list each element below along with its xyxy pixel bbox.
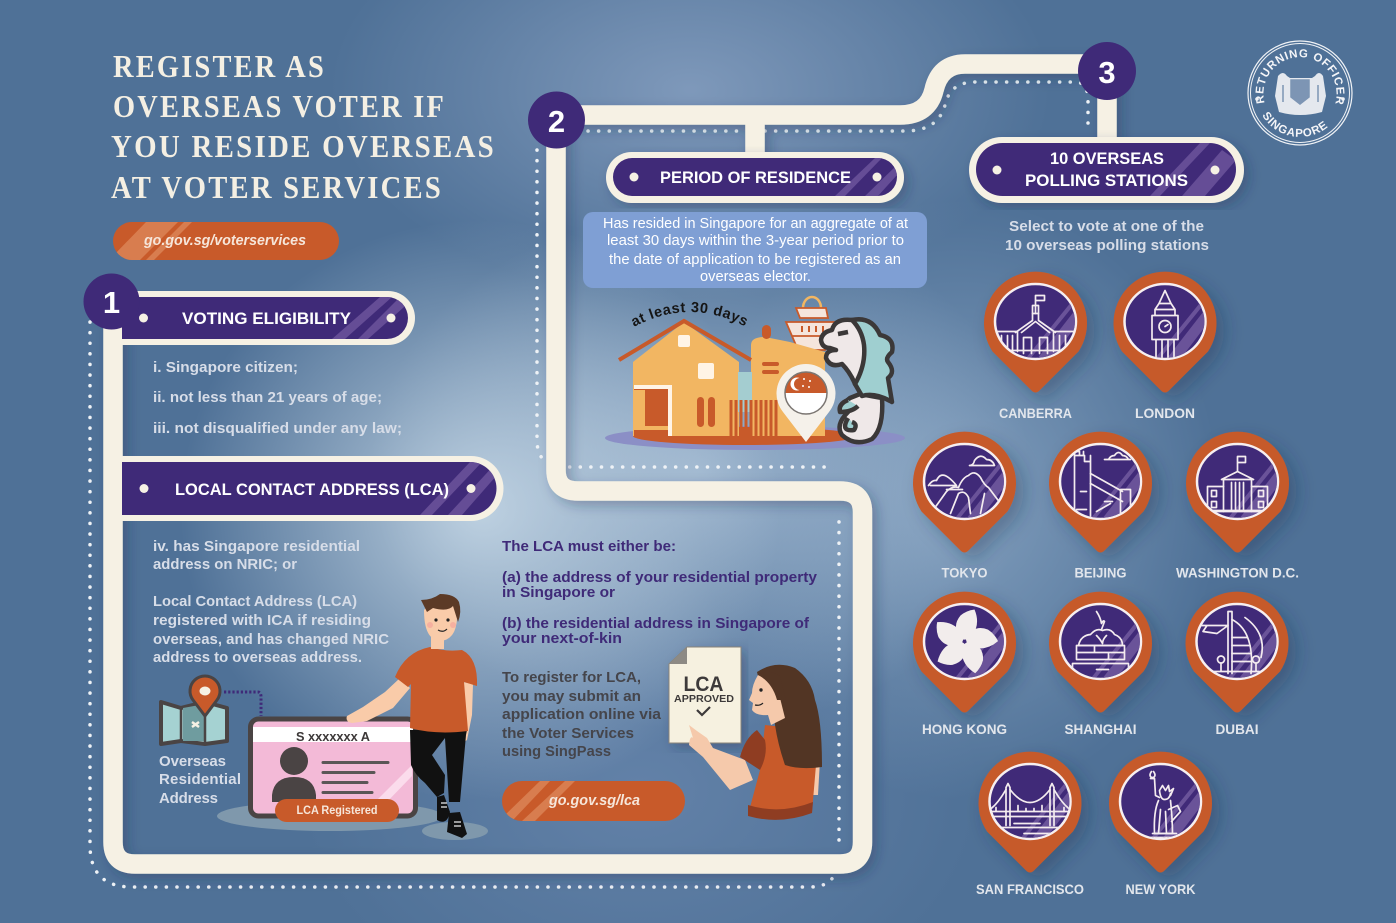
text: overseas residential address: Address xyxy=(159,790,218,807)
step number 3 xyxy=(1078,42,1136,100)
dotted route lines xyxy=(90,82,1088,887)
route path: cream connector line xyxy=(113,64,1107,864)
text: LCA requirements: in Singapore or xyxy=(502,584,615,601)
text: how to register for LCA xyxy=(502,669,662,760)
illustration: approved LCA document xyxy=(669,647,741,743)
callout: residence requirement: the date of application to be registered as an xyxy=(609,252,901,268)
title: REGISTER AS xyxy=(113,48,326,84)
pin: Shanghai: SHANGHAI xyxy=(1064,721,1136,737)
text: how to register for LCA: you may submit an xyxy=(502,688,641,705)
pin: Beijing: BEIJING xyxy=(1074,564,1127,580)
eligibility list: ii. not less than 21 years of age; xyxy=(153,389,382,406)
callout: residence requirement: least 30 days within the 3-year period prior to xyxy=(607,233,904,249)
text: overseas residential address xyxy=(159,753,241,807)
panel heading: period of residence xyxy=(606,152,904,203)
eligibility list: i. Singapore citizen; xyxy=(153,359,298,376)
text: LCA requirements: (a) the address of your residential property xyxy=(502,569,818,586)
logo: Returning Officer Singapore seal: RETURNING OFFICER xyxy=(1256,49,1344,104)
pin: Canberra: CANBERRA xyxy=(999,405,1072,421)
pin: London xyxy=(1114,272,1216,421)
title xyxy=(111,48,496,205)
panel heading: 10 overseas polling stations xyxy=(969,137,1244,203)
NRIC card: S xxxxxxx A xyxy=(296,729,371,744)
pin: New York xyxy=(1109,752,1212,897)
text: polling station instruction: Select to vote at one of the xyxy=(1009,218,1204,235)
text: LCA requirements xyxy=(502,538,818,647)
text: residential address criteria: registered with ICA if residing xyxy=(153,612,371,629)
text: residential address criteria: overseas, and has changed NRIC xyxy=(153,631,389,648)
illustration: woman pointing at document xyxy=(689,665,822,820)
pin: San Francisco: SAN FRANCISCO xyxy=(976,881,1084,897)
icon: merlion statue xyxy=(821,319,892,442)
text: how to register for LCA: To register for LCA, xyxy=(502,669,641,686)
link pill: LCA: go.gov.sg/lca xyxy=(548,792,640,809)
step number 3: 3 xyxy=(1098,55,1116,90)
link pill: voter services xyxy=(113,222,339,260)
pin: Dubai xyxy=(1186,592,1288,737)
step number 2 xyxy=(528,92,585,148)
panel heading: local contact address xyxy=(122,456,504,521)
pin: San Francisco xyxy=(976,752,1084,897)
text: how to register for LCA: using SingPass xyxy=(502,743,611,760)
title: AT VOTER SERVICES xyxy=(111,169,443,205)
text: how to register for LCA: application online via xyxy=(502,706,662,723)
panel heading: voting eligibility: VOTING ELIGIBILITY xyxy=(182,309,352,328)
illustration: approved LCA document: APPROVED xyxy=(674,693,734,705)
panel heading: local contact address: LOCAL CONTACT ADDRESS (LCA) xyxy=(175,480,449,499)
panel heading: 10 overseas polling stations: 10 OVERSEAS xyxy=(1050,149,1164,168)
pin: Washington D.C.: WASHINGTON D.C. xyxy=(1176,564,1299,580)
pin: New York: NEW YORK xyxy=(1126,881,1196,897)
logo: Returning Officer Singapore seal: SINGAPORE xyxy=(1263,112,1328,137)
text: overseas residential address: Overseas xyxy=(159,753,226,770)
eligibility list xyxy=(153,359,402,437)
text: polling station instruction xyxy=(1005,218,1209,254)
pin: Washington D.C. xyxy=(1176,432,1299,580)
pin: Canberra xyxy=(984,272,1087,421)
illustration: approved LCA document: LCA xyxy=(684,673,724,696)
icon: flag location pin xyxy=(776,364,836,442)
text: residential address criteria: Local Contact Address (LCA) xyxy=(153,593,357,610)
step number 1 xyxy=(84,274,140,330)
NRIC card xyxy=(250,719,416,822)
pin: Shanghai xyxy=(1049,592,1152,737)
pin: Tokyo xyxy=(913,432,1016,580)
text: residential address criteria: iv. has Singapore residential xyxy=(153,538,360,555)
callout: residence requirement: Has resided in Singapore for an aggregate of at xyxy=(603,216,908,232)
illustration: Singapore home and landmarks xyxy=(605,296,905,450)
text: LCA requirements: (b) the residential address in Singapore of xyxy=(502,615,810,632)
logo: Returning Officer Singapore seal xyxy=(1247,40,1353,146)
step number 2: 2 xyxy=(548,104,565,139)
pin: Hong Kong xyxy=(913,592,1016,737)
text: residential address criteria: address on NRIC; or xyxy=(153,556,297,573)
dotted link from map to card xyxy=(224,692,261,716)
panel heading: 10 overseas polling stations: POLLING STATIONS xyxy=(1025,171,1188,190)
title: YOU RESIDE OVERSEAS xyxy=(111,128,496,164)
text: how to register for LCA: the Voter Services xyxy=(502,725,634,742)
callout: residence requirement: overseas elector. xyxy=(700,269,811,285)
pin: London: LONDON xyxy=(1135,405,1195,421)
illustration: Singapore home and landmarks: at least 30 days xyxy=(632,302,747,326)
link pill: LCA xyxy=(502,781,685,821)
pin: Dubai: DUBAI xyxy=(1216,721,1258,737)
text: LCA requirements: The LCA must either be: xyxy=(502,538,676,555)
panel heading: period of residence: PERIOD OF RESIDENCE xyxy=(660,168,851,187)
eligibility list: iii. not disqualified under any law; xyxy=(153,420,402,437)
pin: Tokyo: TOKYO xyxy=(942,564,988,580)
ground shadow under card and person xyxy=(217,801,488,840)
title: OVERSEAS VOTER IF xyxy=(113,88,446,124)
text: residential address criteria xyxy=(153,538,389,666)
pin: Beijing xyxy=(1049,432,1152,580)
NRIC card: LCA Registered xyxy=(296,805,378,817)
illustration: man leaning on card xyxy=(347,594,477,838)
icon: map with location pin xyxy=(161,676,227,744)
text: residential address criteria: address to overseas address. xyxy=(153,649,362,666)
panel heading: voting eligibility xyxy=(122,291,415,345)
text: overseas residential address: Residential xyxy=(159,771,241,788)
pin: Hong Kong: HONG KONG xyxy=(922,721,1007,737)
callout: residence requirement xyxy=(583,212,927,288)
link pill: voter services: go.gov.sg/voterservices xyxy=(143,232,306,249)
text: polling station instruction: 10 overseas polling stations xyxy=(1005,237,1209,254)
text: LCA requirements: your next-of-kin xyxy=(502,630,622,647)
step number 1: 1 xyxy=(103,285,120,320)
